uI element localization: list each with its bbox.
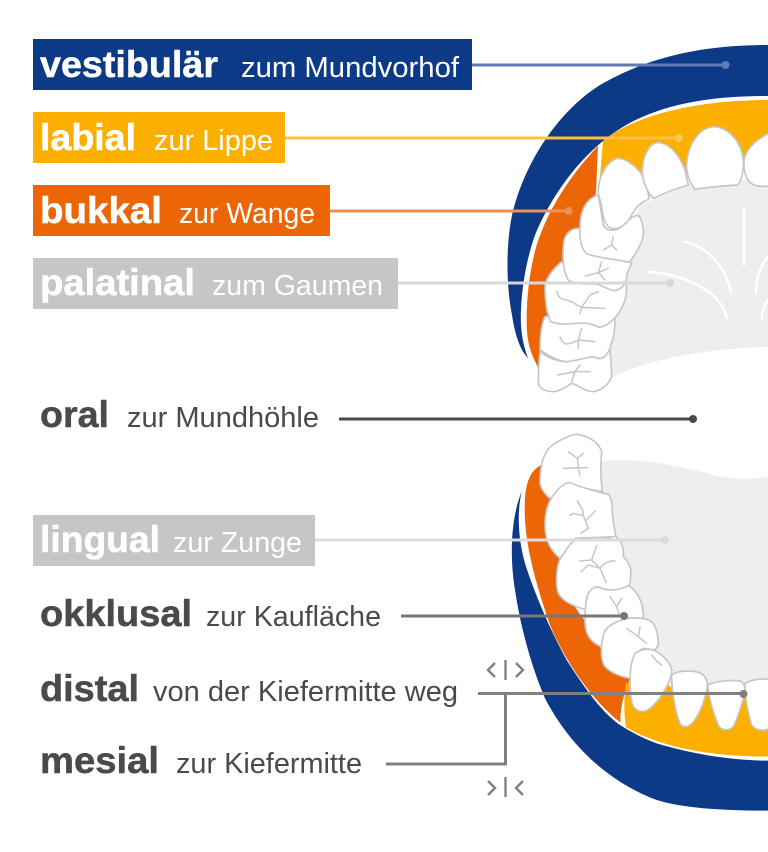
lower cheek-side gum	[525, 465, 630, 723]
icon: away from midline arrows	[488, 660, 523, 680]
label: labial: zur Lippe	[154, 125, 273, 157]
label: mesial	[40, 739, 362, 781]
leader line: oral	[339, 415, 697, 423]
label: labial: labial	[40, 116, 136, 158]
label: palatinal: zum Gaumen	[212, 270, 383, 302]
lower lip band	[512, 492, 768, 811]
upper front teeth	[598, 127, 768, 229]
label: okklusal: okklusal	[40, 592, 192, 634]
lower lip-side gum	[624, 680, 768, 757]
lower back teeth	[540, 434, 643, 647]
label: labial	[33, 112, 285, 163]
upper back teeth	[538, 195, 643, 392]
upper lip-side gum	[600, 100, 768, 190]
palate	[610, 180, 768, 377]
label: distal: von der Kiefermitte weg	[153, 676, 458, 708]
label: vestibulär: vestibulär	[40, 43, 218, 85]
upper tooth fissures	[557, 237, 617, 382]
icon: toward midline arrows	[488, 777, 523, 797]
leader line: labial	[285, 134, 683, 142]
label: oral: zur Mundhöhle	[127, 402, 319, 434]
leader line: bukkal	[330, 207, 572, 215]
upper cheek-side gum	[527, 146, 598, 369]
illustration: upper jaw	[507, 45, 768, 392]
leader line: lingual	[315, 536, 669, 544]
upper lip band	[507, 45, 768, 358]
label: bukkal: zur Wange	[179, 198, 315, 230]
lower tooth fissures, front	[627, 627, 662, 665]
lower tooth fissures	[563, 452, 622, 615]
label: palatinal: palatinal	[40, 261, 195, 303]
label: oral: oral	[40, 393, 109, 435]
label: lingual: lingual	[40, 518, 160, 560]
label: okklusal: zur Kaufläche	[206, 601, 381, 633]
lower front teeth	[601, 618, 768, 730]
label: bukkal	[33, 185, 330, 236]
leader lines: distal and mesial	[386, 690, 748, 764]
tongue	[587, 460, 768, 687]
leader line: palatinal	[398, 279, 674, 287]
label: lingual: zur Zunge	[173, 527, 302, 559]
palate ridges	[649, 210, 768, 318]
illustration: lower jaw	[512, 434, 768, 811]
label: okklusal	[40, 592, 381, 634]
label: distal: distal	[40, 667, 139, 709]
label: vestibulär	[33, 39, 472, 90]
label: palatinal	[33, 258, 398, 309]
leader line: okklusal	[401, 612, 628, 620]
label: distal	[40, 667, 458, 709]
label: lingual	[33, 515, 315, 566]
label: oral	[40, 393, 319, 435]
leader line: vestibulär	[472, 61, 730, 69]
label: mesial: mesial	[40, 739, 159, 781]
label: bukkal: bukkal	[40, 189, 162, 231]
label: mesial: zur Kiefermitte	[176, 748, 362, 780]
label: vestibulär: zum Mundvorhof	[241, 52, 460, 84]
